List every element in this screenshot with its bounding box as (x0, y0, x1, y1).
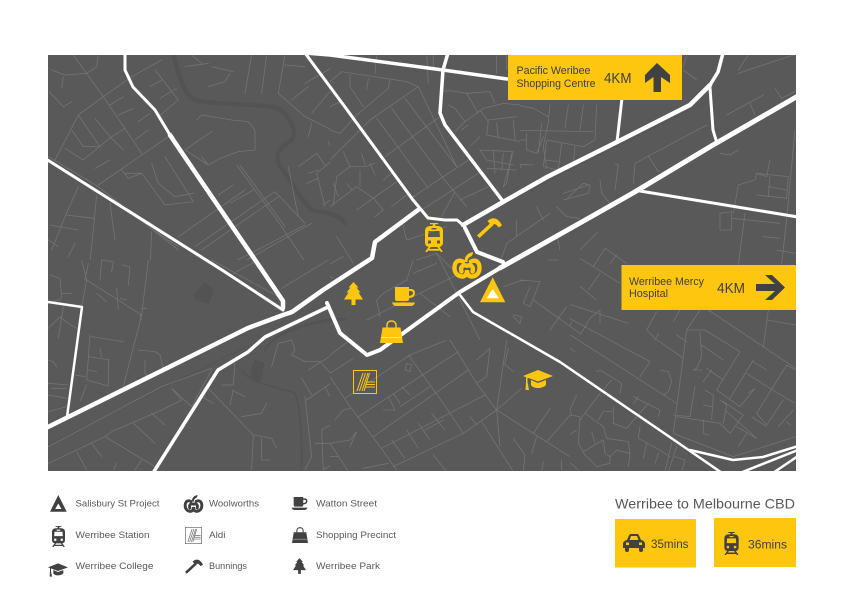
legend item: Salisbury St Project (50, 495, 160, 512)
main roads (46, 53, 798, 473)
legend item: Werribee Station (52, 526, 150, 547)
callout: Werribee Mercy Hospital (622, 265, 796, 310)
callout: Pacific Werribee Shopping Centre (508, 55, 682, 100)
river and park shading (48, 55, 720, 470)
icon: Watton Street on map (392, 287, 415, 306)
callout: Werribee Mercy Hospital: 4KM (717, 281, 745, 297)
legend item: Werribee Station: Werribee Station (76, 530, 150, 541)
panel: train travel time: 36mins (748, 540, 787, 552)
callout: Werribee Mercy Hospital: Werribee Mercy (629, 276, 704, 288)
icon: Aldi on map (354, 370, 376, 394)
legend item: Watton Street (292, 497, 377, 510)
icon: Werribee Park on map (344, 282, 363, 305)
callout: Werribee Mercy Hospital: Hospital (629, 288, 668, 300)
minor streets (48, 55, 796, 472)
icon: Werribee College on map (523, 370, 553, 390)
icon: Werribee Station on map (425, 223, 443, 252)
legend item: Salisbury St Project: Salisbury St Project (76, 498, 160, 510)
legend item: Woolworths (185, 495, 259, 511)
legend item: Bunnings (185, 560, 247, 574)
legend item: Werribee Park (293, 558, 380, 574)
panel: train travel time (714, 518, 796, 567)
legend item: Werribee College: Werribee College (76, 561, 154, 572)
icon: Salisbury St Project on map (480, 277, 505, 302)
legend item: Woolworths: Woolworths (209, 498, 259, 510)
panel: car travel time: 35mins (651, 539, 689, 551)
callout: Pacific Werribee Shopping Centre: 4KM (604, 71, 632, 87)
icon: Woolworths on map (454, 252, 480, 277)
legend item: Shopping Precinct: Shopping Precinct (316, 530, 396, 541)
legend (48, 495, 396, 577)
legend item: Watton Street: Watton Street (316, 498, 377, 510)
panel: car travel time (615, 519, 696, 568)
icon: Shopping Precinct on map (380, 321, 403, 343)
legend item: Bunnings: Bunnings (209, 561, 247, 572)
legend item: Werribee Park: Werribee Park (316, 561, 380, 572)
callout: Pacific Werribee Shopping Centre: Shopping Centre (516, 78, 596, 90)
legend item: Aldi (185, 527, 226, 544)
heading: Werribee to Melbourne CBD: Werribee to Melbourne CBD (615, 496, 795, 512)
legend item: Shopping Precinct (292, 528, 396, 543)
legend item: Aldi: Aldi (209, 530, 226, 541)
callout: Pacific Werribee Shopping Centre: Pacific Weribee (516, 65, 590, 77)
panel: street map (46, 53, 798, 473)
icon: Bunnings hammer on map (477, 218, 502, 238)
legend item: Werribee College (48, 561, 154, 577)
